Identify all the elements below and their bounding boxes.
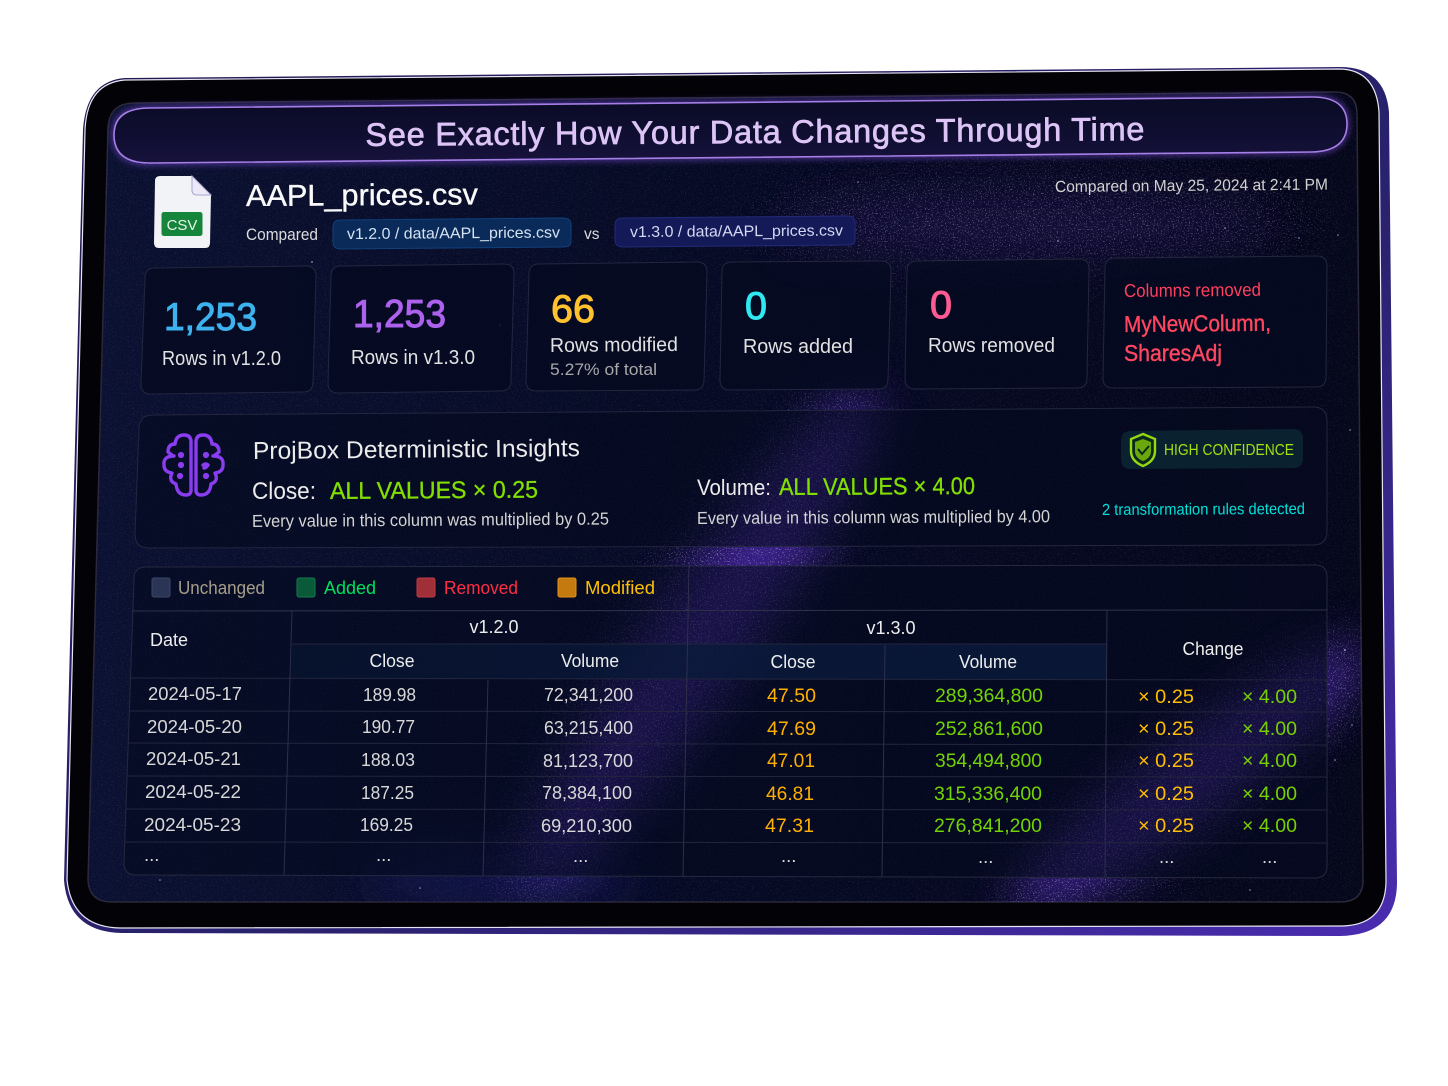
row 2024-05-21: 81,123,700 [543,750,633,771]
row 2024-05-20: 252,861,600 [935,718,1043,740]
legend: Unchanged [178,577,265,598]
title banner [114,97,1347,163]
compared versions: v1.2.0 / data/AAPL_prices.csv [347,225,560,243]
stat card: rows in v1.2.0: 1,253 [164,296,257,339]
stat card: columns removed [1103,256,1327,388]
compared versions [246,216,855,249]
row: ellipsis [144,844,1277,867]
row 2024-05-23: 47.31 [765,815,814,837]
icon: csv file [154,176,211,248]
row: ellipsis: ... [1262,846,1277,867]
panel: deterministic insights: Volume: [697,475,771,500]
confidence badge: HIGH CONFIDENCE [1164,442,1294,459]
stat card: rows in v1.2.0: Rows in v1.2.0 [162,348,281,370]
row 2024-05-17: 2024-05-17 [148,683,242,704]
table header: Close [370,651,414,671]
row 2024-05-22: 78,384,100 [542,782,632,803]
table header: Change [1182,639,1244,659]
confidence badge [1121,429,1303,469]
icon: brain [164,435,223,495]
stat card: rows modified [526,262,707,391]
panel: deterministic insights: Every value in this column was multiplied by 4.00 [697,506,1050,528]
row 2024-05-21: 354,494,800 [935,750,1042,772]
stat card: rows in v1.3.0: Rows in v1.3.0 [351,347,475,369]
row: ellipsis: ... [1159,846,1174,867]
table header: v1.3.0 [866,618,916,638]
row 2024-05-17: × 0.25 [1138,686,1194,708]
stat card: rows modified: Rows modified [550,334,678,357]
row 2024-05-22: 2024-05-22 [145,781,241,802]
table header: Date [150,630,188,650]
row 2024-05-22: × 0.25 [1138,783,1194,805]
row 2024-05-21: × 4.00 [1242,750,1297,772]
stat card: rows removed: 0 [930,284,952,327]
table header [150,617,1244,672]
row 2024-05-21: 188.03 [361,749,415,770]
row 2024-05-23: × 0.25 [1138,815,1194,837]
stat card: rows removed: Rows removed [928,335,1055,357]
row 2024-05-21: 47.01 [767,750,815,772]
table header: v1.2.0 [469,617,519,637]
panel: deterministic insights: ALL VALUES × 0.25 [330,477,538,505]
row: ellipsis: ... [781,845,796,866]
row 2024-05-22: 46.81 [766,783,814,805]
stat card: rows added: Rows added [743,336,853,358]
stat card: rows added [720,261,891,390]
stat card: rows added: 0 [745,285,767,328]
row: ellipsis: ... [376,844,391,865]
row 2024-05-22: 187.25 [361,782,414,803]
row 2024-05-23: 69,210,300 [541,815,632,836]
legend: Added [324,577,376,598]
row: ellipsis: ... [573,845,588,866]
stat card: rows in v1.2.0 [141,266,316,394]
table header: Close [770,652,816,672]
row 2024-05-17: 189.98 [363,684,416,705]
row 2024-05-20: 190.77 [362,716,415,737]
stat card: rows in v1.3.0 [328,264,514,393]
panel: deterministic insights [135,407,1327,548]
panel: deterministic insights: Every value in this column was multiplied by 0.25 [252,509,609,531]
legend: Modified [585,577,655,598]
stat card: columns removed: Columns removed [1124,279,1261,301]
stat card: rows modified: 5.27% of total [550,360,657,379]
panel: deterministic insights: ALL VALUES × 4.00 [779,473,975,501]
stat card: rows in v1.3.0: 1,253 [353,293,446,336]
title banner: See Exactly How Your Data Changes Through Time [365,111,1145,153]
comparison timestamp: Compared on May 25, 2024 at 2:41 PM [1055,177,1328,196]
compared versions: vs [584,226,600,243]
row 2024-05-17: 72,341,200 [544,684,633,705]
file name: AAPL_prices.csv [246,178,478,213]
row 2024-05-20: 47.69 [767,718,816,740]
row 2024-05-23: 276,841,200 [934,815,1042,837]
row: ellipsis: ... [144,844,159,865]
row 2024-05-23 [144,814,1297,837]
screen background with starfield [80,90,1389,943]
legend: Removed [444,577,518,598]
icon: csv file: CSV [167,217,197,234]
table header: Volume [959,652,1017,672]
row 2024-05-23: 169.25 [360,814,413,835]
row 2024-05-17: × 4.00 [1242,686,1297,708]
row 2024-05-22 [145,781,1297,805]
panel: comparison table [124,565,1327,878]
panel: deterministic insights: Close: [252,478,316,505]
row 2024-05-20: × 4.00 [1242,718,1297,740]
stat card: rows modified: 66 [551,288,595,331]
row 2024-05-22: × 4.00 [1242,783,1297,805]
transformation rules note: 2 transformation rules detected [1102,501,1305,519]
row 2024-05-21: × 0.25 [1138,750,1194,772]
stat card: columns removed: MyNewColumn, [1124,310,1271,337]
row 2024-05-21 [146,748,1297,772]
compared versions: v1.3.0 / data/AAPL_prices.csv [630,223,843,241]
row 2024-05-17: 289,364,800 [935,685,1043,707]
compared versions: Compared [246,226,318,244]
device frame [64,67,1397,936]
row 2024-05-20: 2024-05-20 [147,716,242,737]
legend [152,577,655,598]
row 2024-05-20 [147,716,1297,740]
stat card: rows removed [905,259,1089,389]
row 2024-05-23: × 4.00 [1242,815,1297,837]
row: ellipsis: ... [978,846,993,867]
table header: Volume [561,651,619,671]
row 2024-05-20: 63,215,400 [544,717,633,738]
stat card: columns removed: SharesAdj [1124,340,1222,366]
row 2024-05-23: 2024-05-23 [144,814,241,835]
row 2024-05-17 [148,683,1297,708]
row 2024-05-22: 315,336,400 [934,783,1042,805]
row 2024-05-17: 47.50 [767,685,816,707]
row 2024-05-21: 2024-05-21 [146,748,241,769]
row 2024-05-20: × 0.25 [1138,718,1194,740]
sub-header band [291,644,1107,680]
panel: deterministic insights: ProjBox Deterministic Insights [253,435,580,465]
